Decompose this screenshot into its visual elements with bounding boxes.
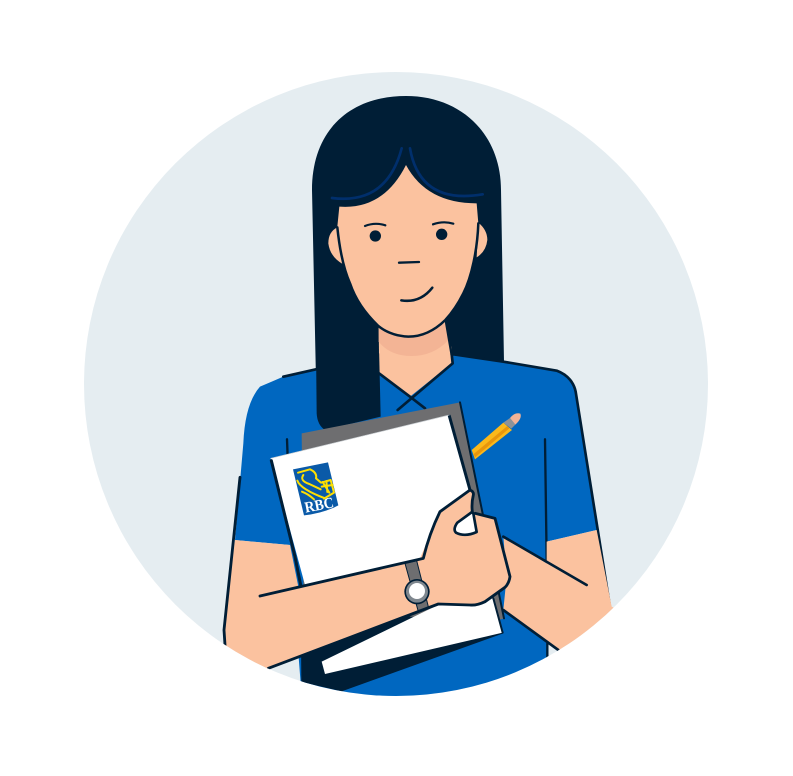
paper shaded edges [271,416,470,585]
arm outline [224,477,510,668]
face outline [337,223,478,337]
pencil [472,413,521,459]
figure [224,96,630,703]
clipboard right edge [460,402,504,618]
right arm [503,530,614,650]
lower white sheet [322,598,503,674]
left eye [370,230,381,242]
left eyebrow [365,224,385,226]
collar lines [283,354,610,607]
RBC logo [293,462,338,517]
pencil eraser [510,413,521,425]
neck right edge [446,320,452,355]
watch strap [405,561,428,612]
clipboard [302,402,504,621]
left arm and hand [224,490,510,680]
paper sheet [271,415,473,585]
right eyebrow [433,222,453,224]
hair front lock [316,347,381,430]
fringe highlights [332,148,483,199]
background circle [84,72,708,696]
illustration: woman holding RBC clipboard [84,72,708,696]
right ear [477,223,487,257]
shirt [235,354,597,703]
logo lion [297,469,334,499]
pencil ferrule [503,418,515,429]
face [337,165,478,337]
clipboard board [302,402,504,621]
right eye [436,229,447,240]
neck upper [378,322,449,354]
thumb gap [455,512,477,535]
nose [399,258,419,266]
wristwatch [404,579,430,604]
logo wordmark: RBC [303,494,335,517]
lower dark folder [301,616,503,692]
pencil body [472,423,512,459]
sleeve seams [287,439,547,658]
logo shield [293,462,338,515]
mouth [401,288,432,301]
upper body [224,347,630,703]
head [328,148,487,356]
left ear [328,227,343,264]
hair back [312,96,504,380]
neck shadow [379,323,449,356]
neck [379,347,452,397]
